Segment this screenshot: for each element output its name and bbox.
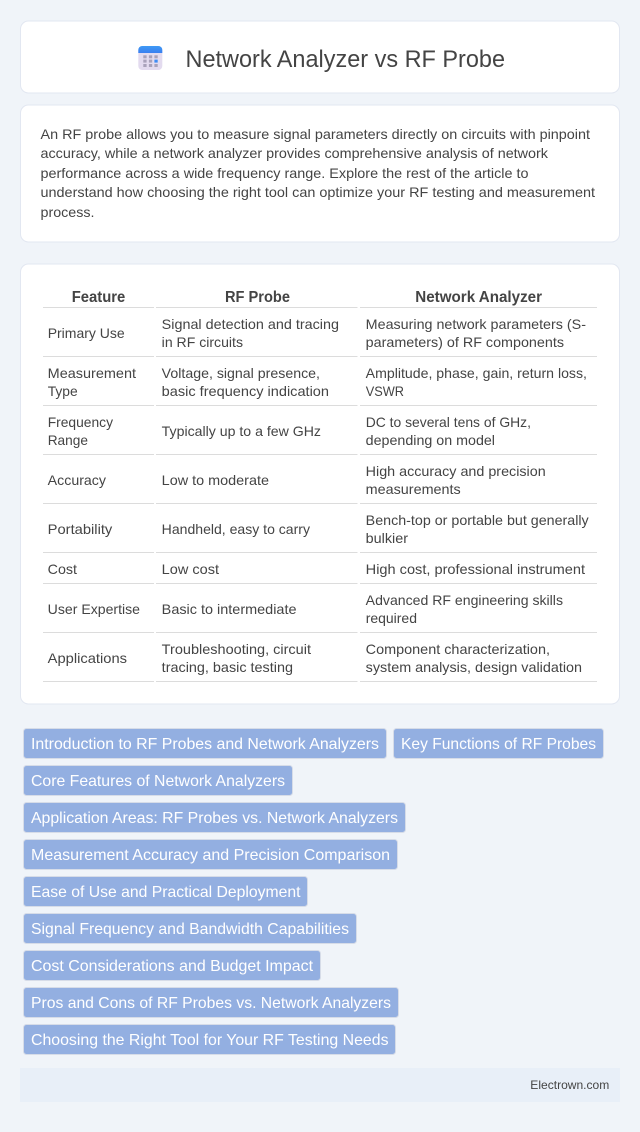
tag: key functions: [394, 728, 604, 758]
row: primary use: Primary Use: [48, 325, 125, 341]
row: accuracy: measurements: [366, 481, 461, 497]
row: applications: system analysis, design validation: [366, 659, 582, 675]
row: primary use: in RF circuits: [162, 334, 243, 350]
row: primary use: [48, 316, 586, 350]
topic tags: [24, 728, 604, 1054]
footer: [20, 1068, 620, 1102]
row: accuracy: Accuracy: [48, 472, 106, 488]
row: measurement type: Voltage, signal presence,: [162, 365, 320, 381]
row: applications: [48, 641, 582, 675]
table header: Feature: [72, 289, 126, 306]
title: Network Analyzer vs RF Probe: [186, 46, 505, 73]
row: measurement type: Measurement: [48, 365, 136, 381]
row: primary use: parameters) of RF components: [366, 334, 564, 350]
row: measurement type: VSWR: [366, 383, 404, 399]
table header: Network Analyzer: [415, 289, 542, 306]
tag: ease of use: Ease of Use and Practical Deployment: [31, 884, 301, 901]
row: portability: Bench-top or portable but generally: [366, 512, 589, 528]
tag: choosing the right tool: Choosing the Right Tool for Your RF Testing Needs: [31, 1032, 388, 1049]
text block: introduction paragraph: understand how choosing the right tool can optimize your RF testing and measurement: [40, 184, 595, 200]
panel: comparison table: [20, 264, 620, 704]
tag: choosing the right tool: [24, 1024, 396, 1054]
tag: signal frequency: Signal Frequency and Bandwidth Capabilities: [31, 921, 349, 938]
row: frequency range: depending on model: [366, 432, 495, 448]
row: cost: Low cost: [162, 561, 219, 577]
tag: cost considerations: [24, 950, 320, 980]
tag: cost considerations: Cost Considerations and Budget Impact: [31, 958, 314, 975]
row: applications: Component characterization,: [366, 641, 550, 657]
row: accuracy: High accuracy and precision: [366, 463, 546, 479]
row: user expertise: [48, 592, 563, 626]
icon: calendar grid: [138, 46, 162, 70]
row: applications: Applications: [48, 650, 127, 666]
text block: introduction paragraph: An RF probe allows you to measure signal parameters directly on circuits with pinpoint: [40, 126, 590, 142]
tag: core features: [24, 766, 292, 796]
text block: introduction paragraph: performance across a wide frequency range. Explore the rest of the article to: [40, 165, 529, 181]
footer credit: Electrown.com: [530, 1078, 609, 1092]
table rows: [48, 316, 589, 675]
row: cost: High cost, professional instrument: [366, 561, 585, 577]
text block: introduction paragraph: process.: [40, 204, 94, 220]
tag: core features: Core Features of Network Analyzers: [31, 773, 285, 790]
tag: pros and cons: Pros and Cons of RF Probes vs. Network Analyzers: [31, 995, 391, 1012]
tag: introduction: [24, 728, 386, 758]
row: portability: bulkier: [366, 530, 408, 546]
row: cost: [48, 561, 585, 577]
tag: application areas: [24, 802, 406, 832]
row: frequency range: Typically up to a few GHz: [162, 423, 321, 439]
table header: RF Probe: [225, 289, 290, 306]
row: applications: tracing, basic testing: [162, 659, 293, 675]
row: user expertise: required: [366, 610, 417, 626]
row: primary use: Signal detection and tracing: [162, 316, 339, 332]
row: accuracy: Low to moderate: [162, 472, 269, 488]
panel: introduction: [20, 105, 620, 242]
row: cost: Cost: [48, 561, 77, 577]
row: portability: Handheld, easy to carry: [162, 521, 310, 537]
tag: application areas: Application Areas: RF Probes vs. Network Analyzers: [31, 810, 398, 827]
row: measurement type: basic frequency indication: [162, 383, 329, 399]
row: frequency range: DC to several tens of GHz,: [366, 414, 531, 430]
text block: introduction paragraph: accuracy, while a network analyzer provides comprehensive analysis of network: [40, 145, 549, 161]
panel: title card: [20, 21, 620, 93]
row: measurement type: Amplitude, phase, gain, return loss,: [366, 365, 587, 381]
tag: measurement accuracy: [24, 840, 398, 870]
row: measurement type: [48, 365, 587, 399]
tag: introduction: Introduction to RF Probes and Network Analyzers: [31, 736, 379, 753]
row: user expertise: User Expertise: [48, 601, 140, 617]
tag: signal frequency: [24, 914, 356, 944]
table header: [72, 289, 542, 306]
row: applications: Troubleshooting, circuit: [162, 641, 311, 657]
row: accuracy: [48, 463, 546, 497]
row: frequency range: Frequency: [48, 414, 113, 430]
row: frequency range: [48, 414, 531, 448]
row: portability: Portability: [48, 521, 112, 537]
row: portability: [48, 512, 589, 546]
row: frequency range: Range: [48, 432, 88, 448]
tag: measurement accuracy: Measurement Accuracy and Precision Comparison: [31, 847, 390, 864]
row: primary use: Measuring network parameters (S-: [366, 316, 586, 332]
text block: introduction paragraph: [40, 126, 595, 220]
tag: ease of use: [24, 876, 308, 906]
row: measurement type: Type: [48, 383, 78, 399]
tag: key functions: Key Functions of RF Probes: [401, 736, 596, 753]
tag: pros and cons: [24, 988, 398, 1018]
row: user expertise: Advanced RF engineering skills: [366, 592, 563, 608]
row: user expertise: Basic to intermediate: [162, 601, 297, 617]
